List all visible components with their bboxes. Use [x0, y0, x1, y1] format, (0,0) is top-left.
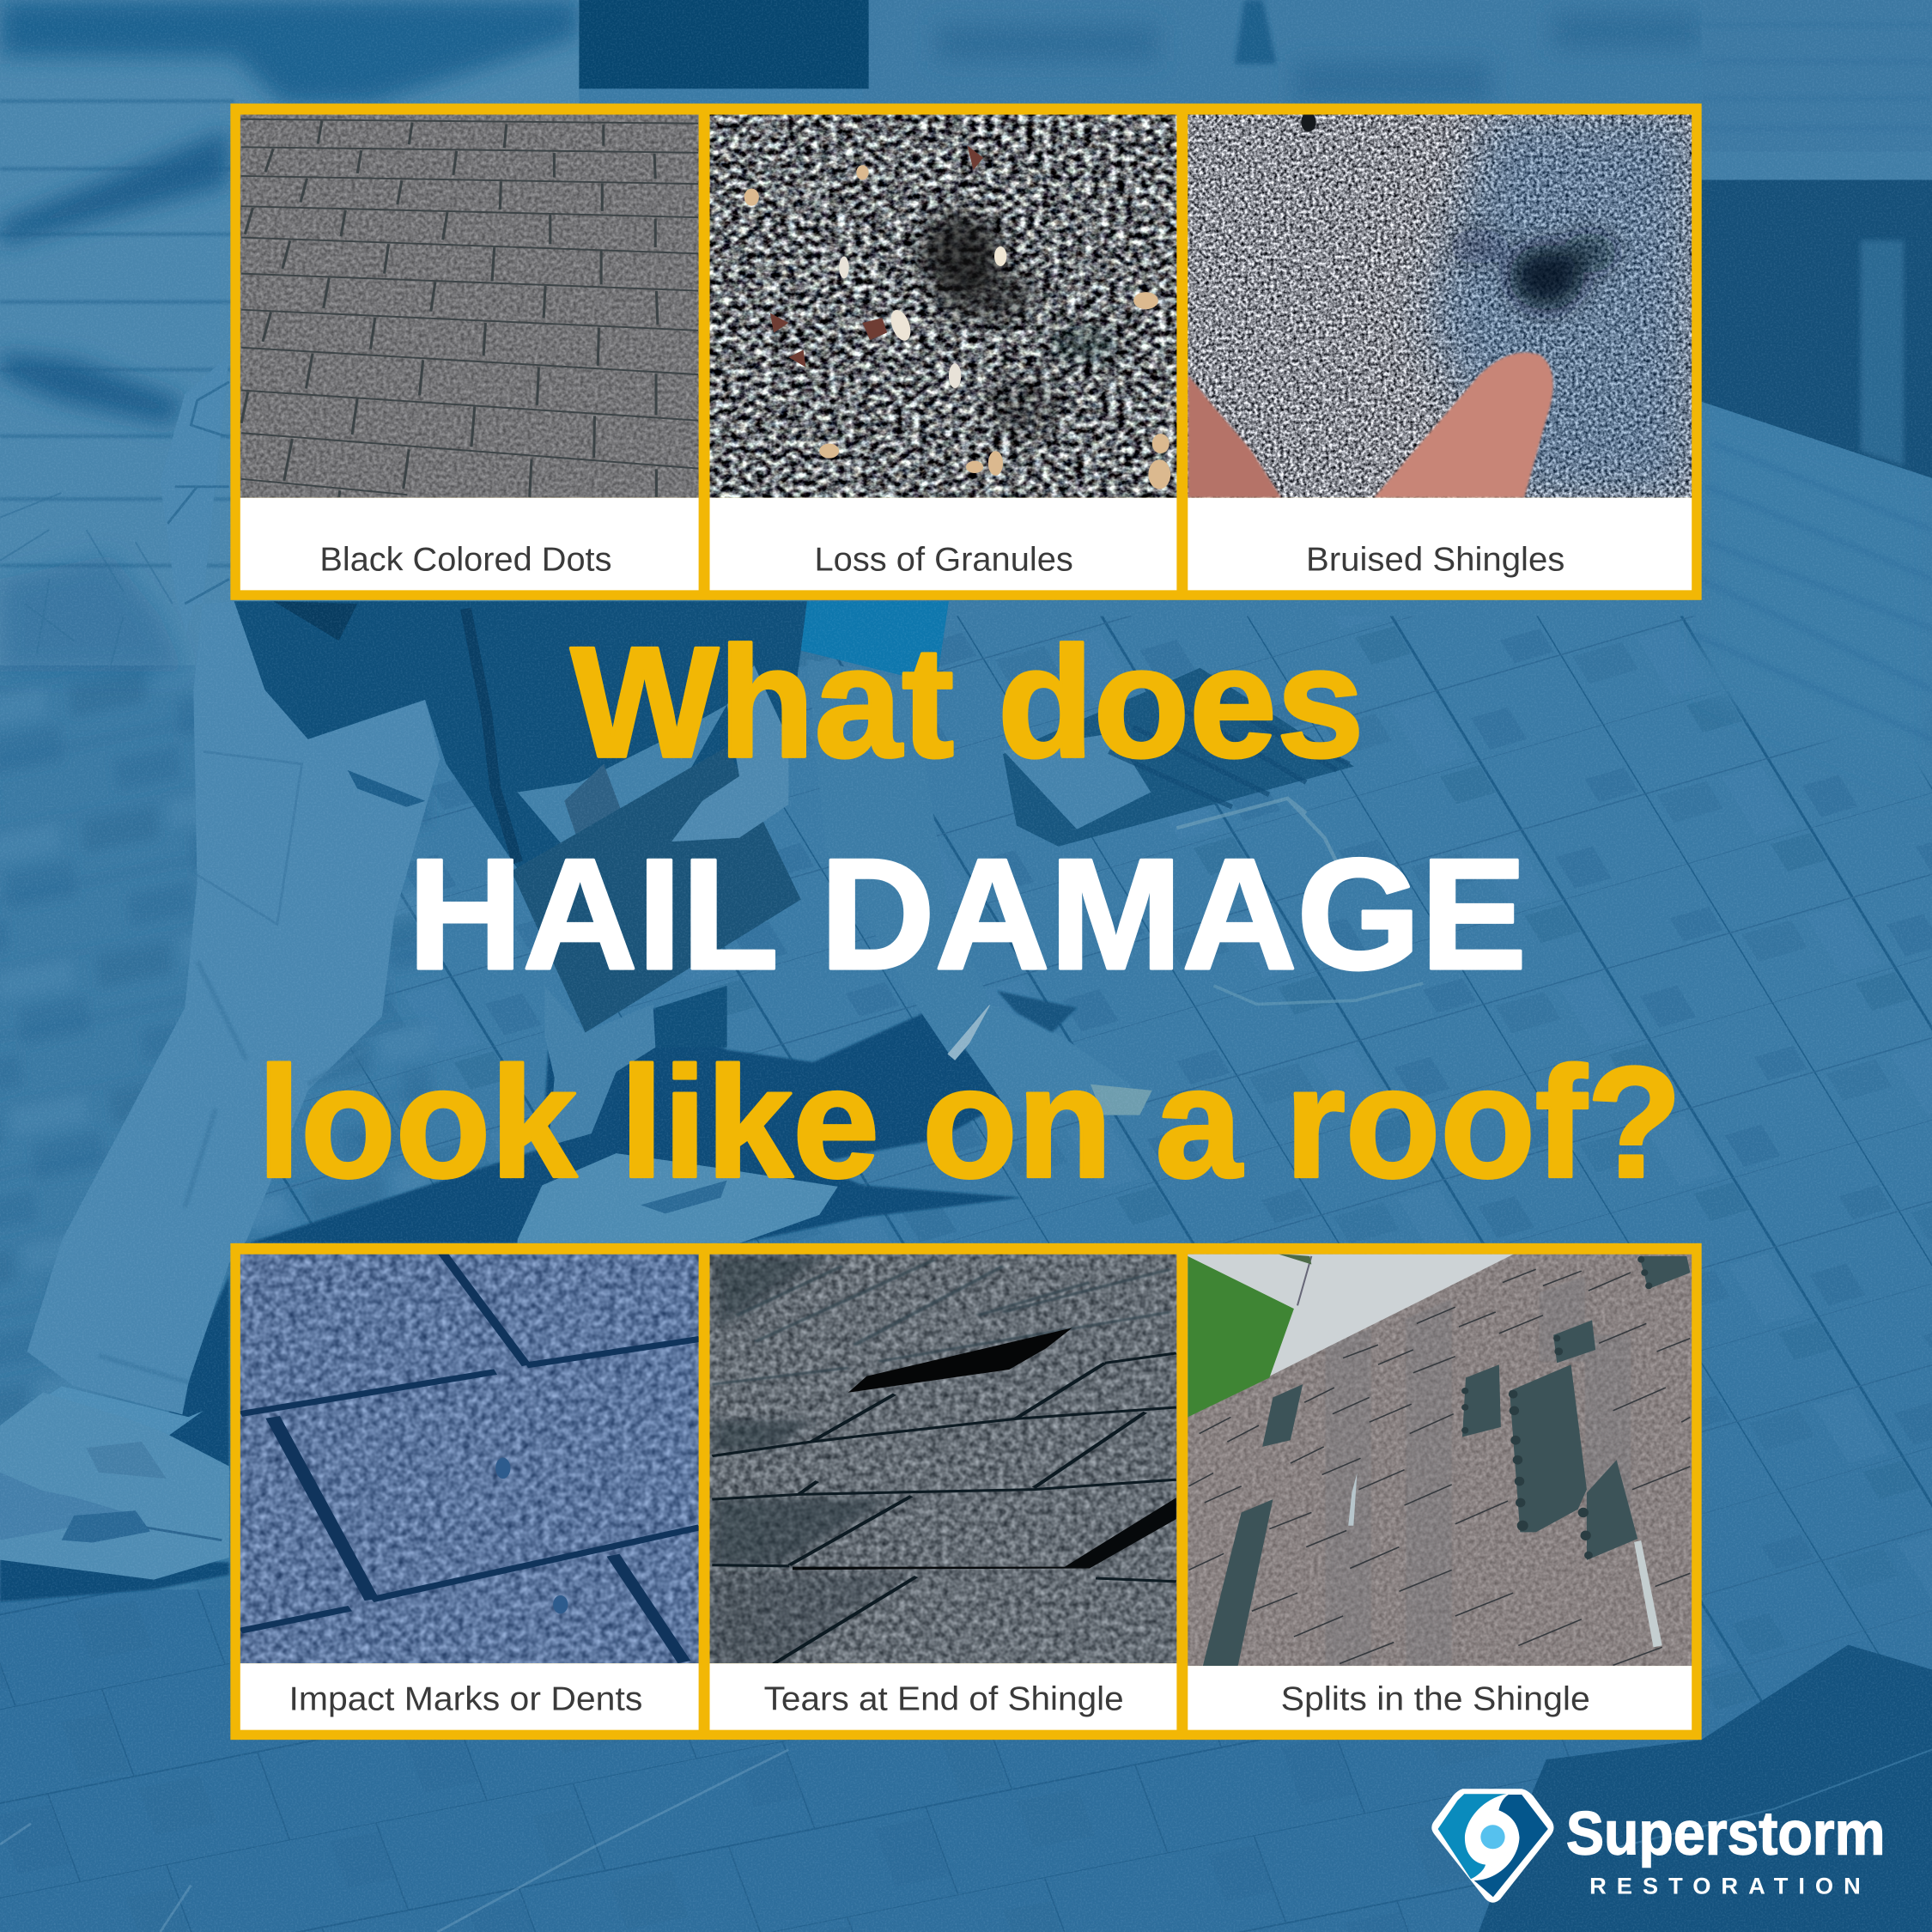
photo: bruised shingles: [1188, 112, 1692, 498]
caption: impact marks or dents: Impact Marks or Dents: [289, 1681, 642, 1718]
title line 2: HAIL DAMAGE: [408, 826, 1527, 1002]
background: top mottled roof and eave: [579, 0, 1932, 478]
photo: black colored dots: [240, 114, 699, 498]
caption: loss of granules: [710, 498, 1176, 590]
wordmark: RESTORATION: RESTORATION: [1589, 1873, 1861, 1899]
title line 3: look like on a roof?: [258, 1034, 1682, 1210]
background: inspector bright shorts, arm and hand: [801, 601, 1152, 1115]
background: inspector trousers front leg: [27, 355, 440, 1442]
frame: bottom gold border: [230, 1243, 1702, 1740]
panel: top photo strip: [230, 104, 1702, 600]
caption: bruised shingles: [1188, 498, 1692, 590]
photo: loss of granules: [710, 114, 1176, 498]
title line 1: What does: [570, 614, 1364, 790]
background: clipboard and hand: [512, 665, 801, 1032]
wordmark: Superstorm: Superstorm: [1566, 1800, 1885, 1868]
caption: black colored dots: Black Colored Dots: [319, 541, 611, 578]
caption: tears at end of shingle: Tears at End of Shingle: [764, 1681, 1124, 1718]
caption: splits in the shingle: [1188, 1666, 1692, 1730]
background: rear leg and rear shoe: [518, 986, 838, 1243]
photo: impact marks or dents: [240, 1254, 700, 1663]
photo: tears at end of shingle: [710, 1255, 1176, 1663]
title: [258, 614, 1682, 1210]
background: house siding and tree shadows: [0, 0, 579, 671]
icon: shield with hurricane swirl: [1431, 1789, 1553, 1903]
panel: bottom photo strip: [230, 1243, 1702, 1740]
logo: Superstorm Restoration: [1431, 1789, 1885, 1903]
background: torso in dark shirt: [234, 601, 807, 869]
background: pale roof crack lines: [0, 1750, 788, 1932]
caption: tears at end of shingle: [710, 1663, 1176, 1730]
caption: loss of granules: Loss of Granules: [815, 541, 1073, 578]
background: dark vent corner behind logo: [1479, 1645, 1932, 1932]
background: roof vent with sign: [1003, 668, 1423, 1004]
frame: top gold border: [230, 104, 1702, 600]
caption: black colored dots: [240, 498, 699, 590]
background: cast shadow of inspector: [0, 1008, 1023, 1601]
caption: bruised shingles: Bruised Shingles: [1306, 541, 1564, 578]
caption: splits in the shingle: Splits in the Shingle: [1281, 1681, 1590, 1718]
background: front shoe: [0, 1392, 229, 1580]
photo: splits in the shingle: [1188, 1254, 1692, 1667]
caption: impact marks or dents: [240, 1663, 699, 1730]
